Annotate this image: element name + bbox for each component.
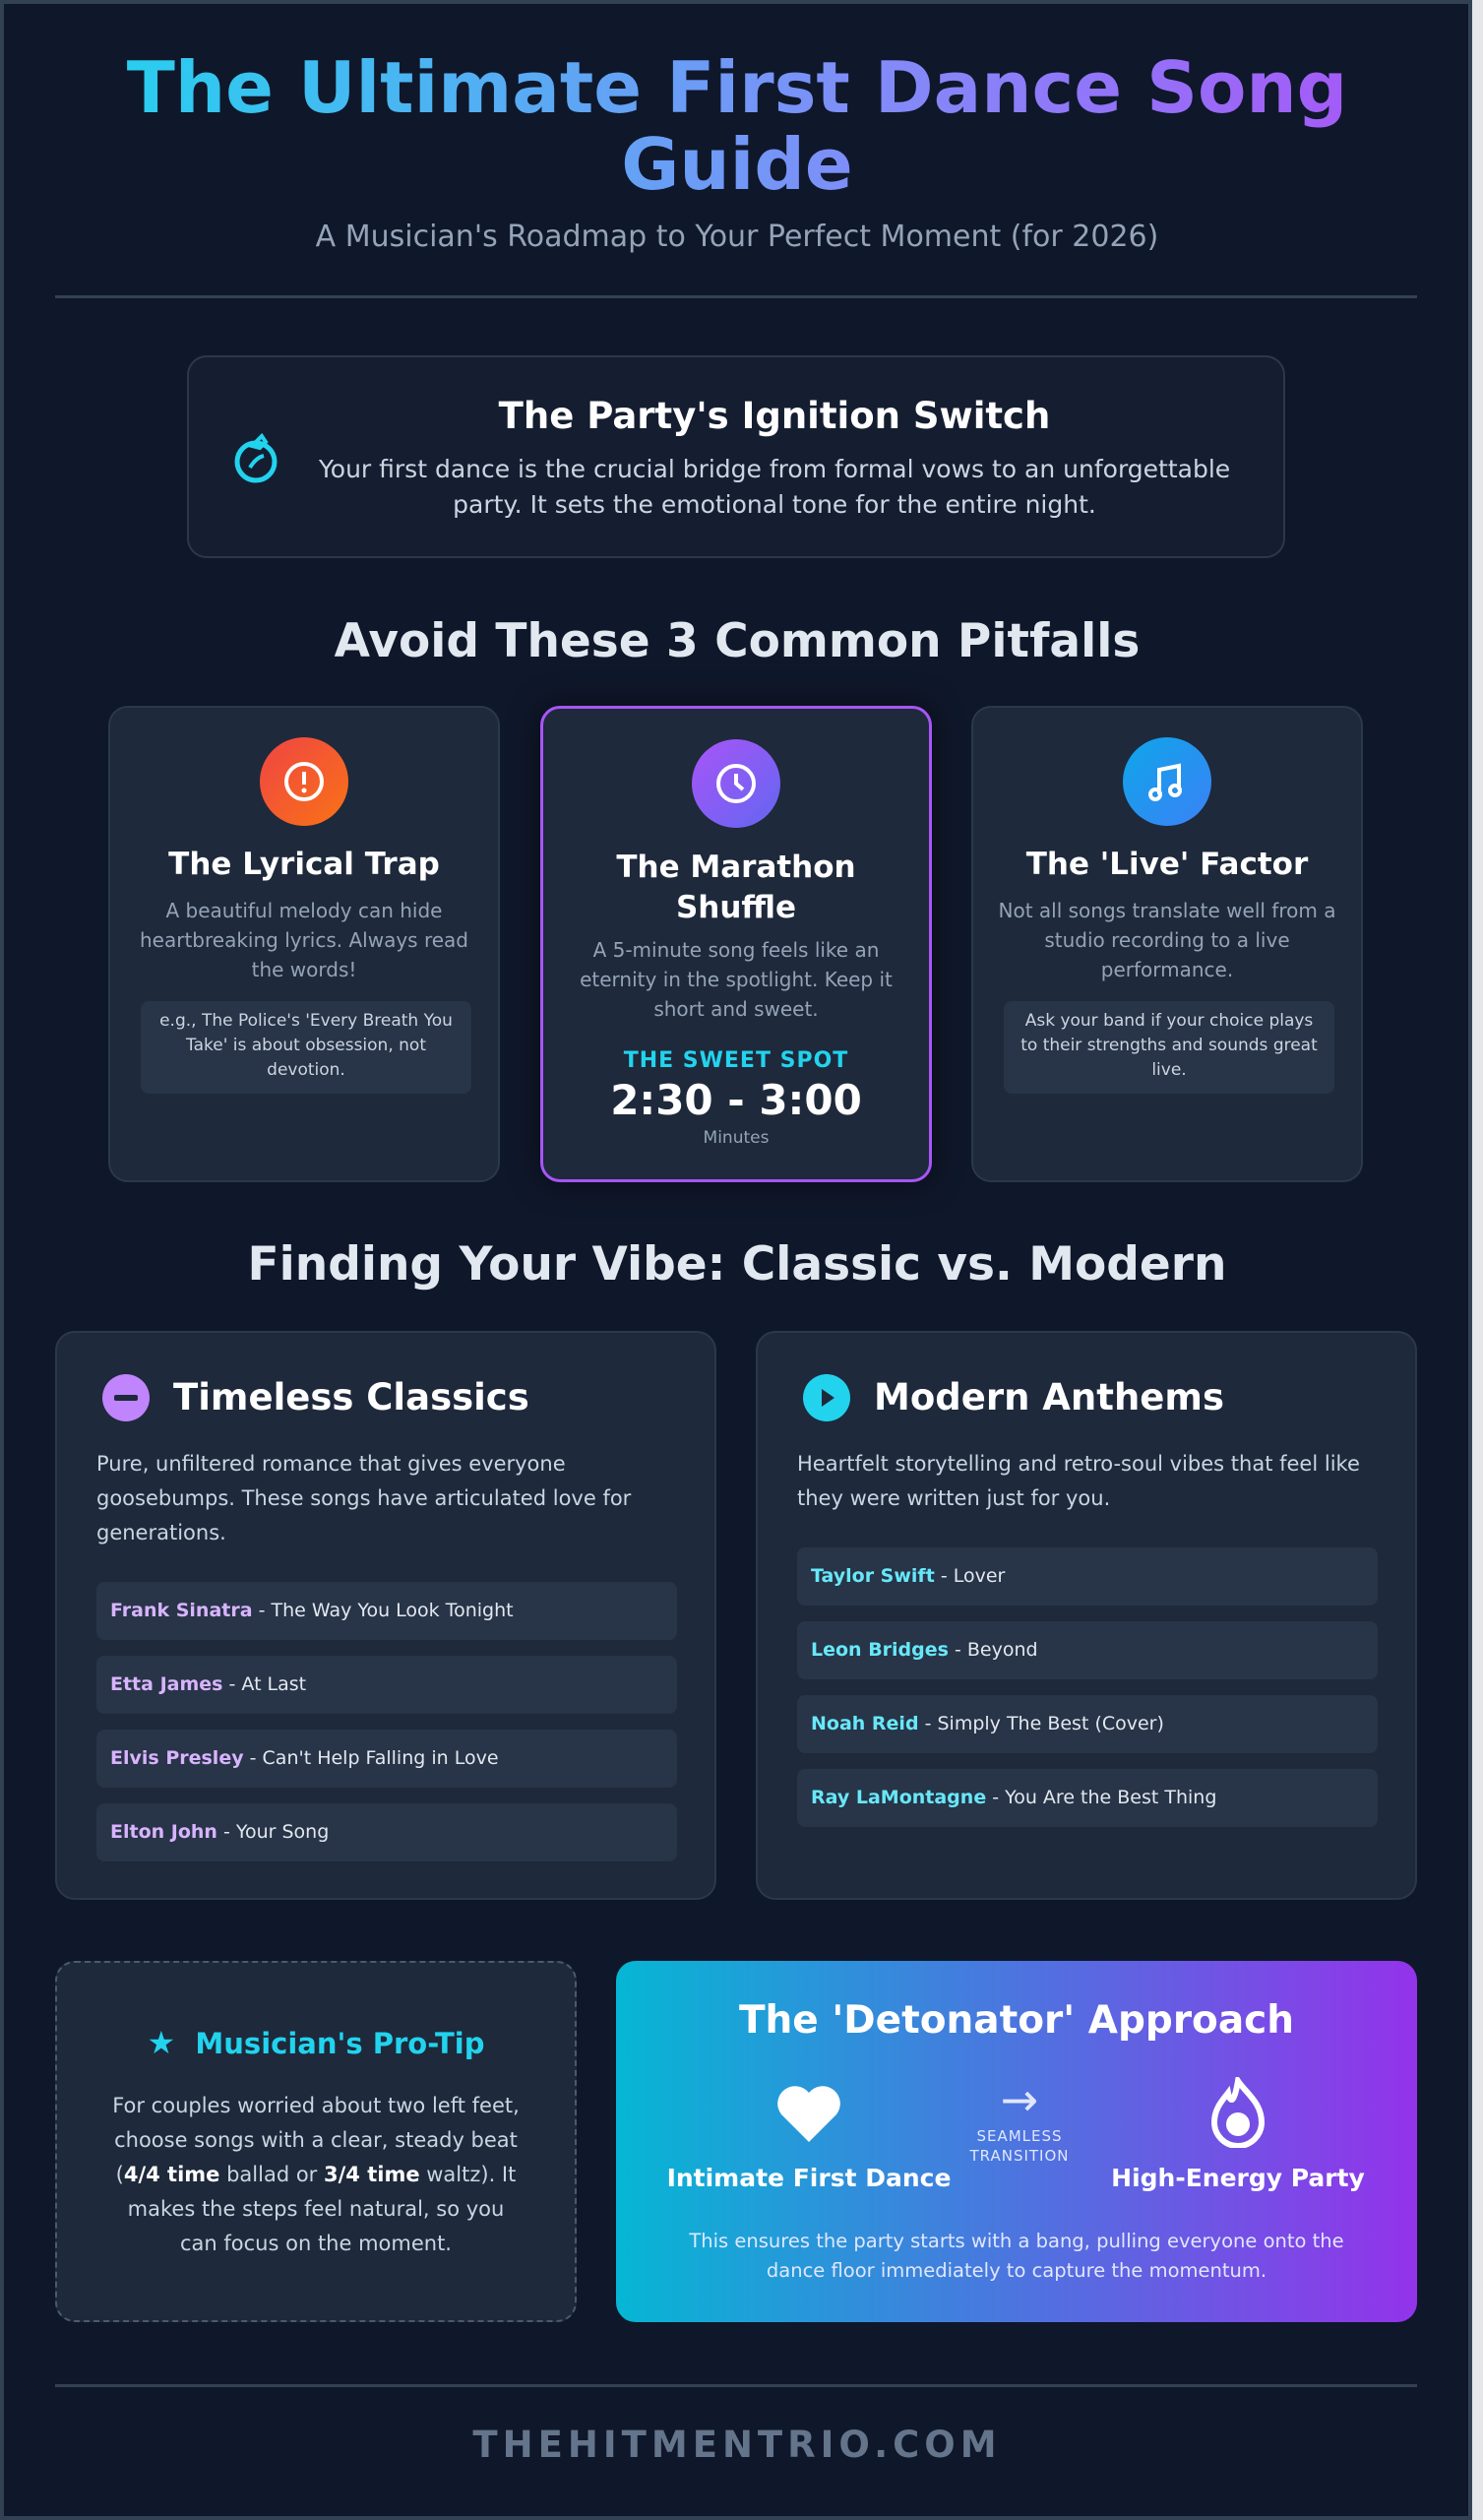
description: Not all songs translate well from a studio recording to a live performance.	[999, 899, 1335, 981]
icon: heart	[777, 2086, 840, 2142]
arrow: transition	[969, 2073, 1070, 2165]
label: party: High-Energy Party	[1111, 2164, 1365, 2192]
song list: Noah Reid - Simply The Best (Cover)	[811, 1713, 1164, 1734]
panel: pro tip	[55, 1961, 577, 2322]
text: Heartfelt storytelling and retro-soul vibes that feel like they were written just for you.	[797, 1452, 1360, 1510]
heading: Timeless Classics	[173, 1376, 529, 1418]
text: Your first dance is the crucial bridge from formal vows to an unforgettable party. It sets the emotional tone for the entire night.	[319, 455, 1230, 519]
card title: The Marathon Shuffle	[616, 850, 856, 925]
card: live factor	[971, 706, 1363, 1182]
sweet spot: THE SWEET SPOT	[624, 1048, 848, 1073]
panel: timeless classics	[55, 1331, 716, 1900]
text: This ensures the party starts with a bang, pulling everyone onto the dance floor immediately to capture the momentum.	[689, 2230, 1344, 2282]
song list	[797, 1547, 1378, 1827]
icon: minus circle	[102, 1374, 150, 1421]
example box: e.g., The Police's 'Every Breath You Take' is about obsession, not devotion.	[159, 1011, 453, 1080]
footer: THEHITMENTRIO.COM	[472, 2424, 1002, 2466]
title: The Ultimate First Dance Song Guide	[127, 46, 1347, 206]
card title: The Lyrical Trap	[168, 847, 440, 882]
icon: clock	[692, 739, 780, 828]
song list: Leon Bridges - Beyond	[811, 1639, 1038, 1661]
song list: Elton John - Your Song	[110, 1821, 329, 1843]
icon: warning	[260, 737, 348, 826]
song list: Ray LaMontagne - You Are the Best Thing	[811, 1787, 1216, 1808]
arrow: transition: SEAMLESS	[976, 2127, 1063, 2145]
heading: The 'Detonator' Approach	[739, 1998, 1294, 2043]
heading: pitfalls: Avoid These 3 Common Pitfalls	[335, 614, 1140, 668]
sweet spot: 2:30 - 3:00	[610, 1076, 862, 1124]
panel: detonator approach	[616, 1961, 1417, 2322]
heading: ★ Musician's Pro-Tip	[148, 2024, 484, 2061]
example box	[141, 1001, 471, 1094]
panel: modern anthems	[756, 1331, 1417, 1900]
tip box	[1004, 1001, 1334, 1094]
card: marathon shuffle	[540, 706, 932, 1182]
sweet spot	[610, 1048, 862, 1148]
icon: music note	[1123, 737, 1211, 826]
card: lyrical trap	[108, 706, 500, 1182]
song list: Elvis Presley - Can't Help Falling in Love	[110, 1747, 499, 1769]
description: A beautiful melody can hide heartbreaking lyrics. Always read the words!	[140, 899, 468, 981]
panel: ignition switch	[187, 355, 1285, 558]
icon: ignition	[234, 433, 278, 482]
arrow: transition: TRANSITION	[969, 2147, 1070, 2165]
arrow: transition: →	[1001, 2073, 1038, 2126]
text: For couples worried about two left feet, choose songs with a clear, steady beat (4/4 time ballad or 3/4 time waltz). It makes the steps feel natural, so you can focus on the moment.	[112, 2094, 520, 2255]
icon: fire	[1211, 2077, 1265, 2148]
song list: Frank Sinatra - The Way You Look Tonight	[110, 1600, 514, 1621]
text: Pure, unfiltered romance that gives everyone goosebumps. These songs have articulated love for generations.	[96, 1452, 631, 1544]
label: intimate: Intimate First Dance	[667, 2164, 951, 2192]
song list: Taylor Swift - Lover	[811, 1565, 1005, 1587]
subtitle: A Musician's Roadmap to Your Perfect Moment (for 2026)	[316, 220, 1158, 254]
heading: vibe: Finding Your Vibe: Classic vs. Modern	[248, 1237, 1226, 1292]
song list	[96, 1582, 677, 1861]
song list: Etta James - At Last	[110, 1673, 306, 1695]
heading: The Party's Ignition Switch	[499, 395, 1050, 437]
card title: The 'Live' Factor	[1026, 847, 1308, 882]
icon: play	[803, 1374, 850, 1421]
tip box: Ask your band if your choice plays to their strengths and sounds great live.	[1020, 1011, 1318, 1080]
sweet spot: Minutes	[704, 1128, 769, 1148]
description: A 5-minute song feels like an eternity in the spotlight. Keep it short and sweet.	[580, 938, 893, 1021]
heading: Modern Anthems	[874, 1376, 1224, 1418]
